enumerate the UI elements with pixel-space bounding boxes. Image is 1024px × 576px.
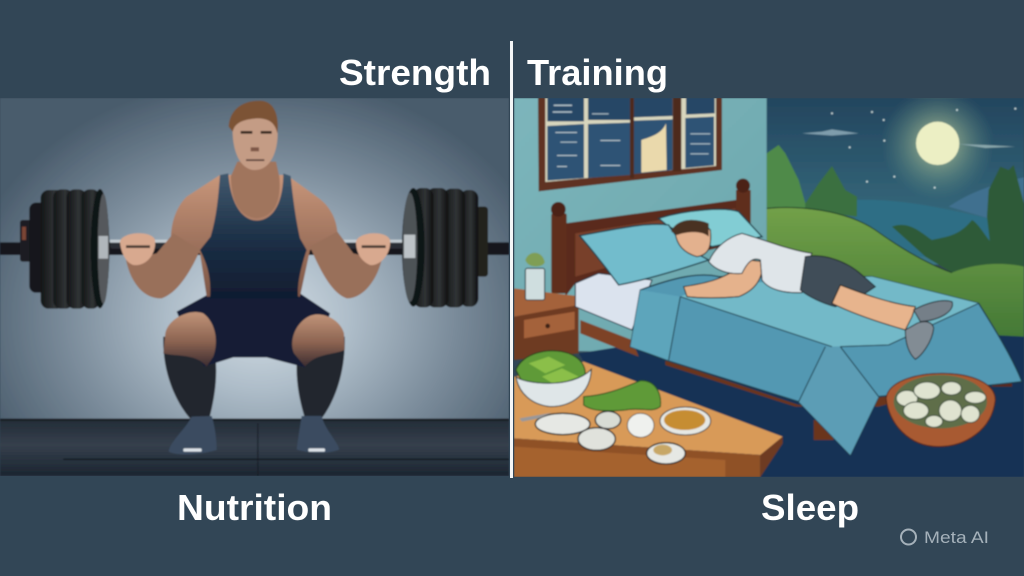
- framed pictures: [538, 98, 722, 191]
- knife: [519, 413, 552, 422]
- oysters and plates on table: [535, 407, 711, 464]
- shoes: [169, 416, 217, 454]
- blanket: [630, 275, 1022, 455]
- green hills: [767, 207, 1024, 350]
- tank top: [200, 173, 307, 298]
- gym floor: [0, 419, 509, 476]
- right weight plates: [402, 188, 488, 307]
- pillows: [580, 209, 762, 285]
- left weight plates: [20, 189, 109, 309]
- center divider: [510, 41, 513, 478]
- wall backdrop: [0, 98, 509, 420]
- head: [233, 117, 278, 170]
- nightstand and plant: [514, 253, 582, 360]
- bowl of greens: [516, 351, 591, 407]
- bowl of oysters on floor: [886, 373, 995, 447]
- sleeping man: [671, 220, 953, 359]
- heading: Training: Training: [527, 52, 668, 93]
- green vegetables: [584, 381, 661, 411]
- watermark: Meta AI: Meta AI: [924, 529, 989, 547]
- panel: sleep and nutrition illustration: [514, 87, 1024, 477]
- mattress and bed frame: [575, 273, 1012, 440]
- label: Nutrition: Nutrition: [177, 487, 332, 528]
- bedroom wall: [514, 98, 767, 351]
- heading: Strength: Strength: [339, 52, 491, 93]
- label: Sleep: Sleep: [761, 487, 859, 528]
- lower legs: [163, 337, 216, 418]
- night sky: [767, 98, 1024, 265]
- panel: strength training photo: [0, 98, 509, 476]
- bed headboard: [551, 179, 751, 297]
- hands: [120, 233, 155, 265]
- watermark: Meta AI: [901, 529, 989, 547]
- thighs and knees: [163, 312, 216, 367]
- barbell: [0, 188, 509, 309]
- wooden food table: [514, 362, 783, 477]
- torso and arms: [171, 175, 338, 297]
- distant hills and lake: [767, 145, 1024, 273]
- moon: [803, 98, 1018, 192]
- carpet: [579, 323, 1024, 477]
- shorts: [177, 293, 330, 367]
- neck and chest: [231, 162, 280, 218]
- athlete: [120, 101, 390, 454]
